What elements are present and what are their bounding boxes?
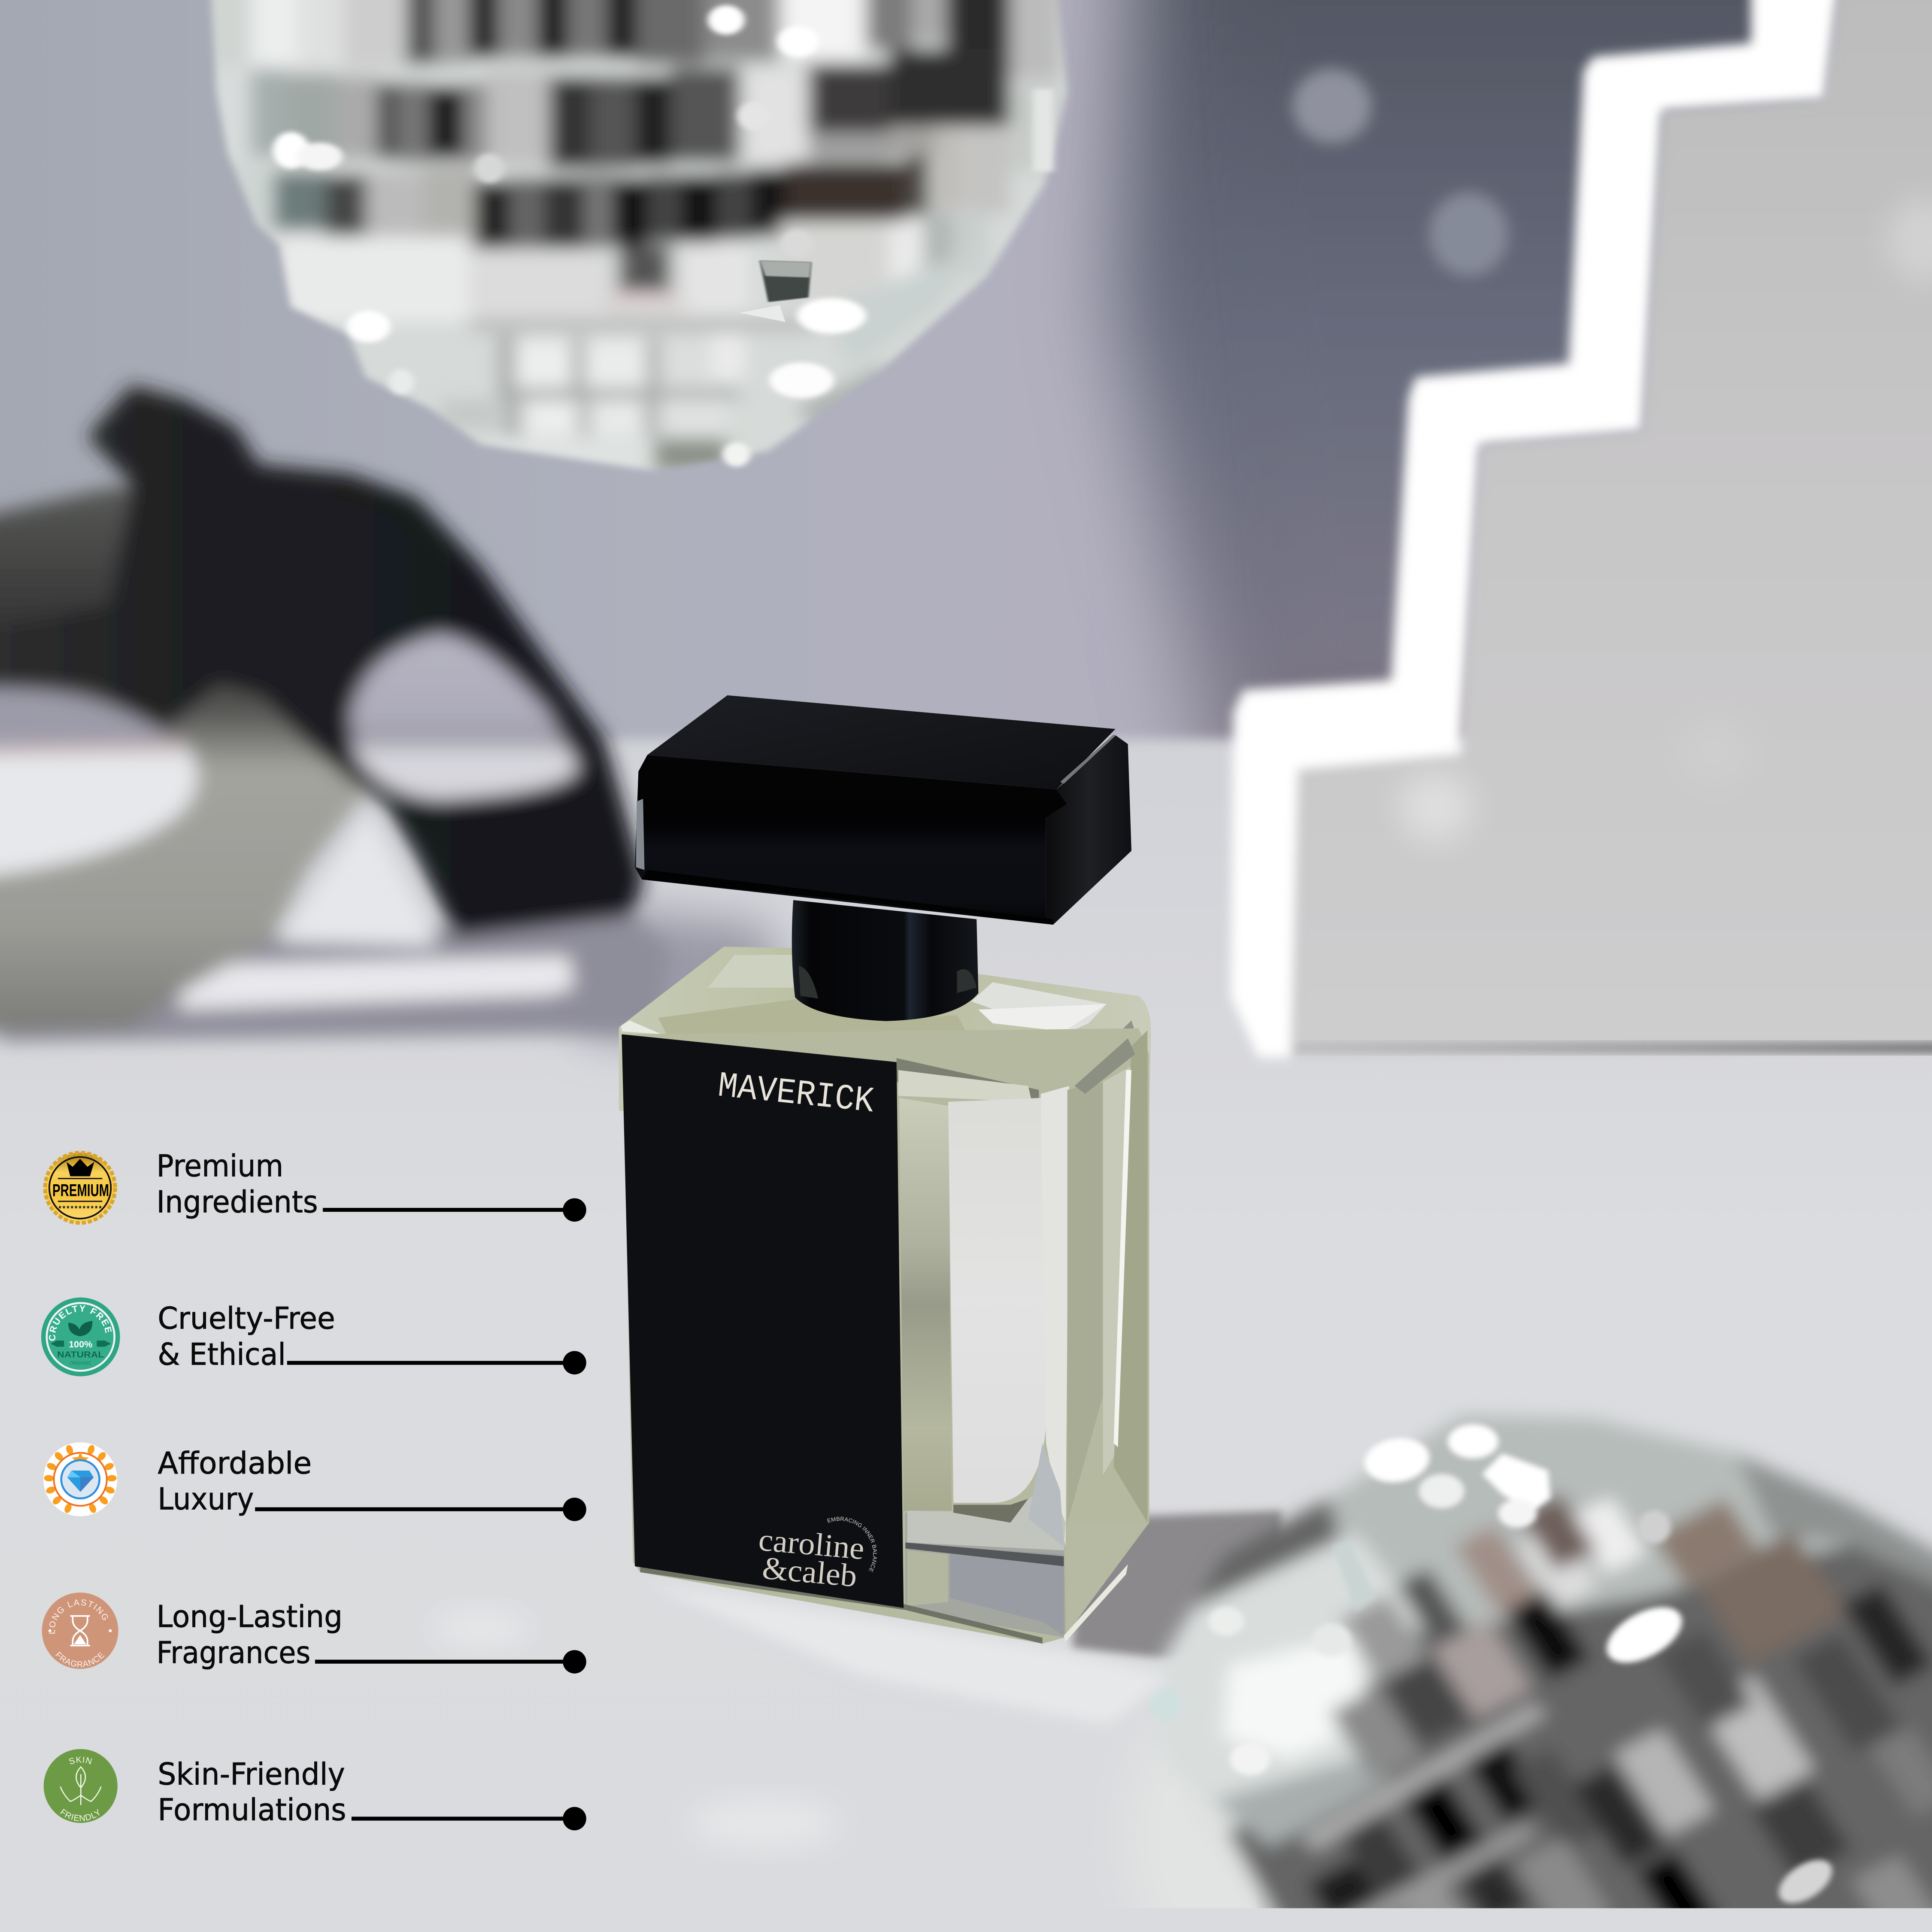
front label bbox=[622, 1034, 904, 1608]
blurred mask shadow bbox=[0, 385, 670, 1042]
perfume bottle bbox=[619, 695, 1151, 1644]
label bbox=[158, 1301, 335, 1372]
icon: diamond laurel bbox=[43, 1442, 117, 1516]
leader line bbox=[315, 1650, 586, 1674]
label: Affordable bbox=[158, 1446, 312, 1481]
icon: cruelty free seal bbox=[41, 1298, 120, 1376]
label: & Ethical bbox=[158, 1337, 286, 1372]
bottom ball highlights bbox=[1150, 1424, 1843, 1910]
icon: premium gold seal bbox=[45, 1153, 115, 1223]
bright floor spots bbox=[431, 1609, 1300, 1932]
icon: cruelty free seal: ORGANIC bbox=[70, 1361, 91, 1366]
label: Fragrances bbox=[157, 1635, 310, 1670]
icon: hourglass badge: LONG LASTING bbox=[48, 1598, 111, 1635]
label: Premium bbox=[157, 1149, 283, 1184]
brand logo: caroline bbox=[757, 1522, 866, 1567]
label: Ingredients bbox=[157, 1185, 318, 1220]
label: Formulations bbox=[158, 1792, 346, 1828]
bottom disco ball bbox=[1137, 1395, 1932, 1932]
feature: cruelty-free bbox=[41, 1298, 586, 1376]
white stepped block bbox=[1231, 0, 1932, 1057]
floor bbox=[0, 739, 1932, 1932]
label: Skin-Friendly bbox=[158, 1757, 345, 1792]
neck bbox=[792, 900, 978, 1021]
icon: cruelty free seal: CRUELTY FREE bbox=[47, 1303, 114, 1341]
label bbox=[158, 1757, 346, 1828]
label bbox=[158, 1446, 312, 1516]
light spots on wall and block bbox=[1292, 69, 1932, 842]
foot of the bottom disco ball bbox=[1257, 1891, 1932, 1932]
leader line bbox=[287, 1351, 586, 1374]
icon: hourglass badge bbox=[42, 1592, 118, 1669]
leader line bbox=[255, 1498, 586, 1521]
top disco ball bbox=[136, 0, 1171, 522]
brand logo bbox=[757, 1516, 878, 1594]
bottle glow on floor bbox=[641, 1582, 1171, 1725]
icon: skin friendly badge: FRIENDLY bbox=[58, 1808, 103, 1823]
icon: cruelty free seal: NATURAL bbox=[57, 1350, 104, 1359]
leader line bbox=[352, 1807, 586, 1830]
icon: cruelty free seal: 100% bbox=[69, 1339, 92, 1350]
bottle body glass bbox=[622, 1028, 1149, 1644]
label bbox=[157, 1599, 343, 1670]
feature: premium ingredients bbox=[45, 1149, 586, 1223]
feature: affordable luxury bbox=[43, 1442, 586, 1521]
shadowed wall on right bbox=[1115, 0, 1823, 789]
icon: skin friendly badge bbox=[44, 1749, 118, 1823]
label: Luxury bbox=[158, 1481, 254, 1516]
icon: hourglass badge: FRAGRANCE bbox=[54, 1650, 107, 1669]
soft purple shadow fading right of mask bbox=[579, 906, 789, 1041]
icon: premium gold seal: ★★★★★★★★★★★ bbox=[58, 1204, 102, 1210]
floor shadow beside bottle bbox=[1072, 1510, 1281, 1659]
product name: MAVERICK bbox=[716, 1066, 876, 1122]
icon: premium gold seal: PREMIUM bbox=[52, 1180, 109, 1200]
background wall bbox=[0, 0, 1932, 789]
bottle shoulder glass bbox=[619, 946, 1151, 1111]
icon: skin friendly badge: SKIN bbox=[68, 1755, 94, 1767]
glass shard reflection bbox=[740, 261, 811, 322]
cap bbox=[635, 695, 1131, 925]
label: Cruelty-Free bbox=[158, 1301, 335, 1336]
feature: long-lasting bbox=[42, 1592, 586, 1674]
label bbox=[157, 1149, 318, 1220]
ball highlights bbox=[273, 5, 1053, 467]
label: Long-Lasting bbox=[157, 1599, 343, 1634]
leader line bbox=[323, 1198, 586, 1222]
brand logo: EMBRACING INNER BALANCE bbox=[826, 1516, 878, 1573]
dark wall near steps bbox=[1232, 0, 1823, 739]
feature: skin-friendly bbox=[44, 1749, 586, 1830]
brand logo: &caleb bbox=[761, 1550, 858, 1594]
